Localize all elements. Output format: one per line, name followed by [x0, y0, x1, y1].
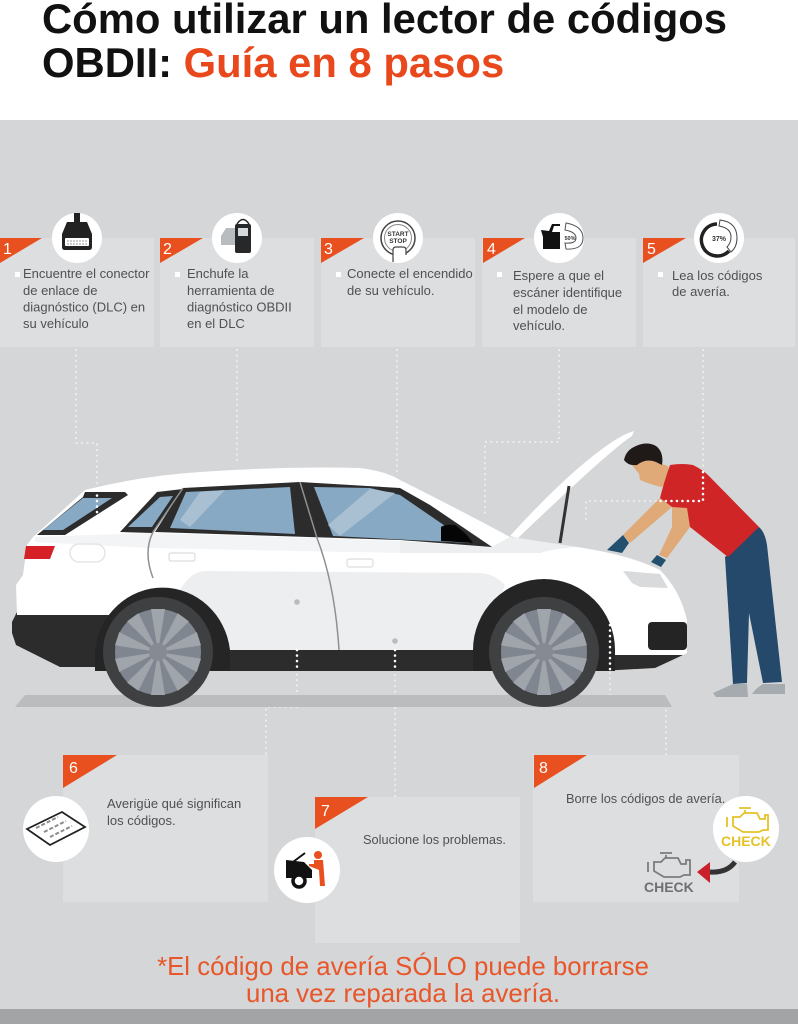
- step 3 flag: [321, 238, 364, 263]
- step 2 panel: [160, 213, 314, 347]
- footer note: [157, 952, 649, 1008]
- step 2 flag: 2: [163, 241, 172, 258]
- mechanic hair: [624, 444, 662, 465]
- step 1 icon: OBD connector: [52, 213, 102, 263]
- step 1 flag: [0, 238, 42, 263]
- car mirror: [441, 525, 473, 543]
- step 7 flag: 7: [321, 803, 330, 820]
- dotted connector lines: [76, 350, 703, 797]
- step 2 icon: scanner and car: [212, 213, 262, 263]
- step 6 flag: 6: [69, 760, 78, 777]
- car mid window: [170, 487, 295, 534]
- car front window: [314, 487, 470, 543]
- step 5 flag: 5: [647, 241, 656, 258]
- step 7 icon: mechanic at car: [274, 837, 340, 903]
- step 2 text: diagnóstico OBDII: [187, 300, 292, 314]
- car fuel cap: [70, 544, 105, 562]
- step 1 bullet: [15, 272, 20, 277]
- car hood strut: [560, 486, 569, 543]
- mechanic neck and face: [632, 460, 670, 487]
- step 4 bullet: [497, 272, 502, 277]
- step 3 icon: start stop button: [373, 213, 423, 263]
- step 1 panel: [0, 213, 154, 347]
- step 5 flag: [643, 238, 686, 263]
- icon: yellow engine check: [713, 796, 779, 862]
- car belt-line band: [35, 533, 400, 553]
- step 4 text: el modelo de: [513, 302, 587, 317]
- mechanic far arm: [623, 498, 672, 543]
- car body: [16, 468, 687, 655]
- step 5 icon: progress ring: [694, 213, 744, 263]
- car door lines: [148, 482, 339, 650]
- step 2 text: Enchufe la: [187, 266, 249, 281]
- step 3 bullet: [336, 272, 341, 277]
- step 6 panel: [23, 755, 268, 902]
- step 4 icon: vehicle identification: [534, 213, 584, 263]
- mechanic trousers: [725, 527, 782, 684]
- step 8 panel: [533, 755, 779, 902]
- step 1 text: Encuentre el conector: [23, 266, 150, 281]
- title: [42, 0, 727, 86]
- step 4 panel: [482, 213, 636, 347]
- step 8 flag: [534, 755, 587, 788]
- car grille: [648, 622, 687, 650]
- connector start dots: [294, 599, 398, 644]
- mechanic gloves: [607, 535, 666, 567]
- step 4 flag: [483, 238, 525, 263]
- car window reflections: [180, 489, 395, 536]
- step 3 icon: start stop button: START: [387, 231, 409, 238]
- car window frame: [155, 482, 492, 547]
- step 2 text: en el DLC: [187, 316, 245, 331]
- car hood shading: [400, 537, 577, 553]
- car open hood: [510, 431, 634, 538]
- step 7 text: Solucione los problemas.: [363, 832, 506, 847]
- step 8 text: Borre los códigos de avería.: [566, 791, 725, 806]
- footer note: una vez reparada la avería.: [246, 980, 560, 1008]
- illustration: mechanic: [607, 444, 785, 697]
- step 1 flag: 1: [3, 241, 12, 258]
- step 1 text: su vehículo: [23, 316, 89, 331]
- car door handles: [169, 553, 373, 567]
- step 6 text: Averigüe qué significan: [107, 796, 241, 811]
- step 3 panel: [321, 213, 475, 347]
- mechanic shoes: [713, 684, 785, 697]
- step 1 text: de enlace de: [23, 283, 97, 298]
- step 4 icon: vehicle identification: 50%: [564, 236, 576, 242]
- step 2 flag: [160, 238, 203, 263]
- step 2 text: herramienta de: [187, 283, 274, 298]
- connector dots over car: [97, 472, 703, 672]
- step 4 text: Espere a que el: [513, 268, 604, 283]
- step 6 flag: [63, 755, 117, 788]
- step 2 bullet: [175, 272, 180, 277]
- step 7 panel: [274, 797, 520, 943]
- step 5 panel: [643, 213, 795, 347]
- mechanic shirt: [660, 464, 759, 557]
- icon: grey engine check: CHECK: [644, 879, 694, 895]
- car lower black trim: [12, 612, 683, 671]
- step 8 flag: 8: [539, 760, 548, 777]
- footer note: *El código de avería SÓLO puede borrarse: [157, 952, 649, 981]
- step 7 flag: [315, 797, 368, 829]
- car quarter window: [120, 489, 183, 533]
- arrow: [697, 862, 735, 883]
- icon: grey engine check: [644, 853, 694, 895]
- front wheel: [473, 579, 615, 707]
- step 4 text: escáner identifique: [513, 285, 622, 300]
- step 6 text: los códigos.: [107, 813, 176, 828]
- step 5 icon: progress ring: 37%: [712, 236, 727, 243]
- step 5 text: Lea los códigos: [672, 268, 763, 283]
- mechanic near arm: [659, 507, 690, 558]
- step 1 text: diagnóstico (DLC) en: [23, 300, 145, 314]
- step 3 icon: start stop button: STOP: [389, 238, 407, 245]
- rear wheel: [95, 588, 230, 707]
- car headlight: [623, 571, 668, 588]
- car tail light: [24, 546, 55, 559]
- step 5 text: de avería.: [672, 284, 730, 299]
- step 3 flag: 3: [324, 241, 333, 258]
- ground shadow: [15, 695, 672, 707]
- step 4 flag: 4: [487, 241, 496, 258]
- step 5 bullet: [658, 272, 663, 277]
- car door shading: [180, 571, 505, 650]
- step 6 icon: clipboard: [23, 796, 89, 862]
- icon: yellow engine check: CHECK: [721, 833, 771, 849]
- illustration: car: [12, 431, 687, 707]
- car rear window: [37, 492, 128, 535]
- step 3 text: de su vehículo.: [347, 283, 434, 298]
- step 4 text: vehículo.: [513, 318, 565, 333]
- title: OBDII: Guía en 8 pasos: [42, 39, 504, 86]
- step 3 text: Conecte el encendido: [347, 266, 473, 281]
